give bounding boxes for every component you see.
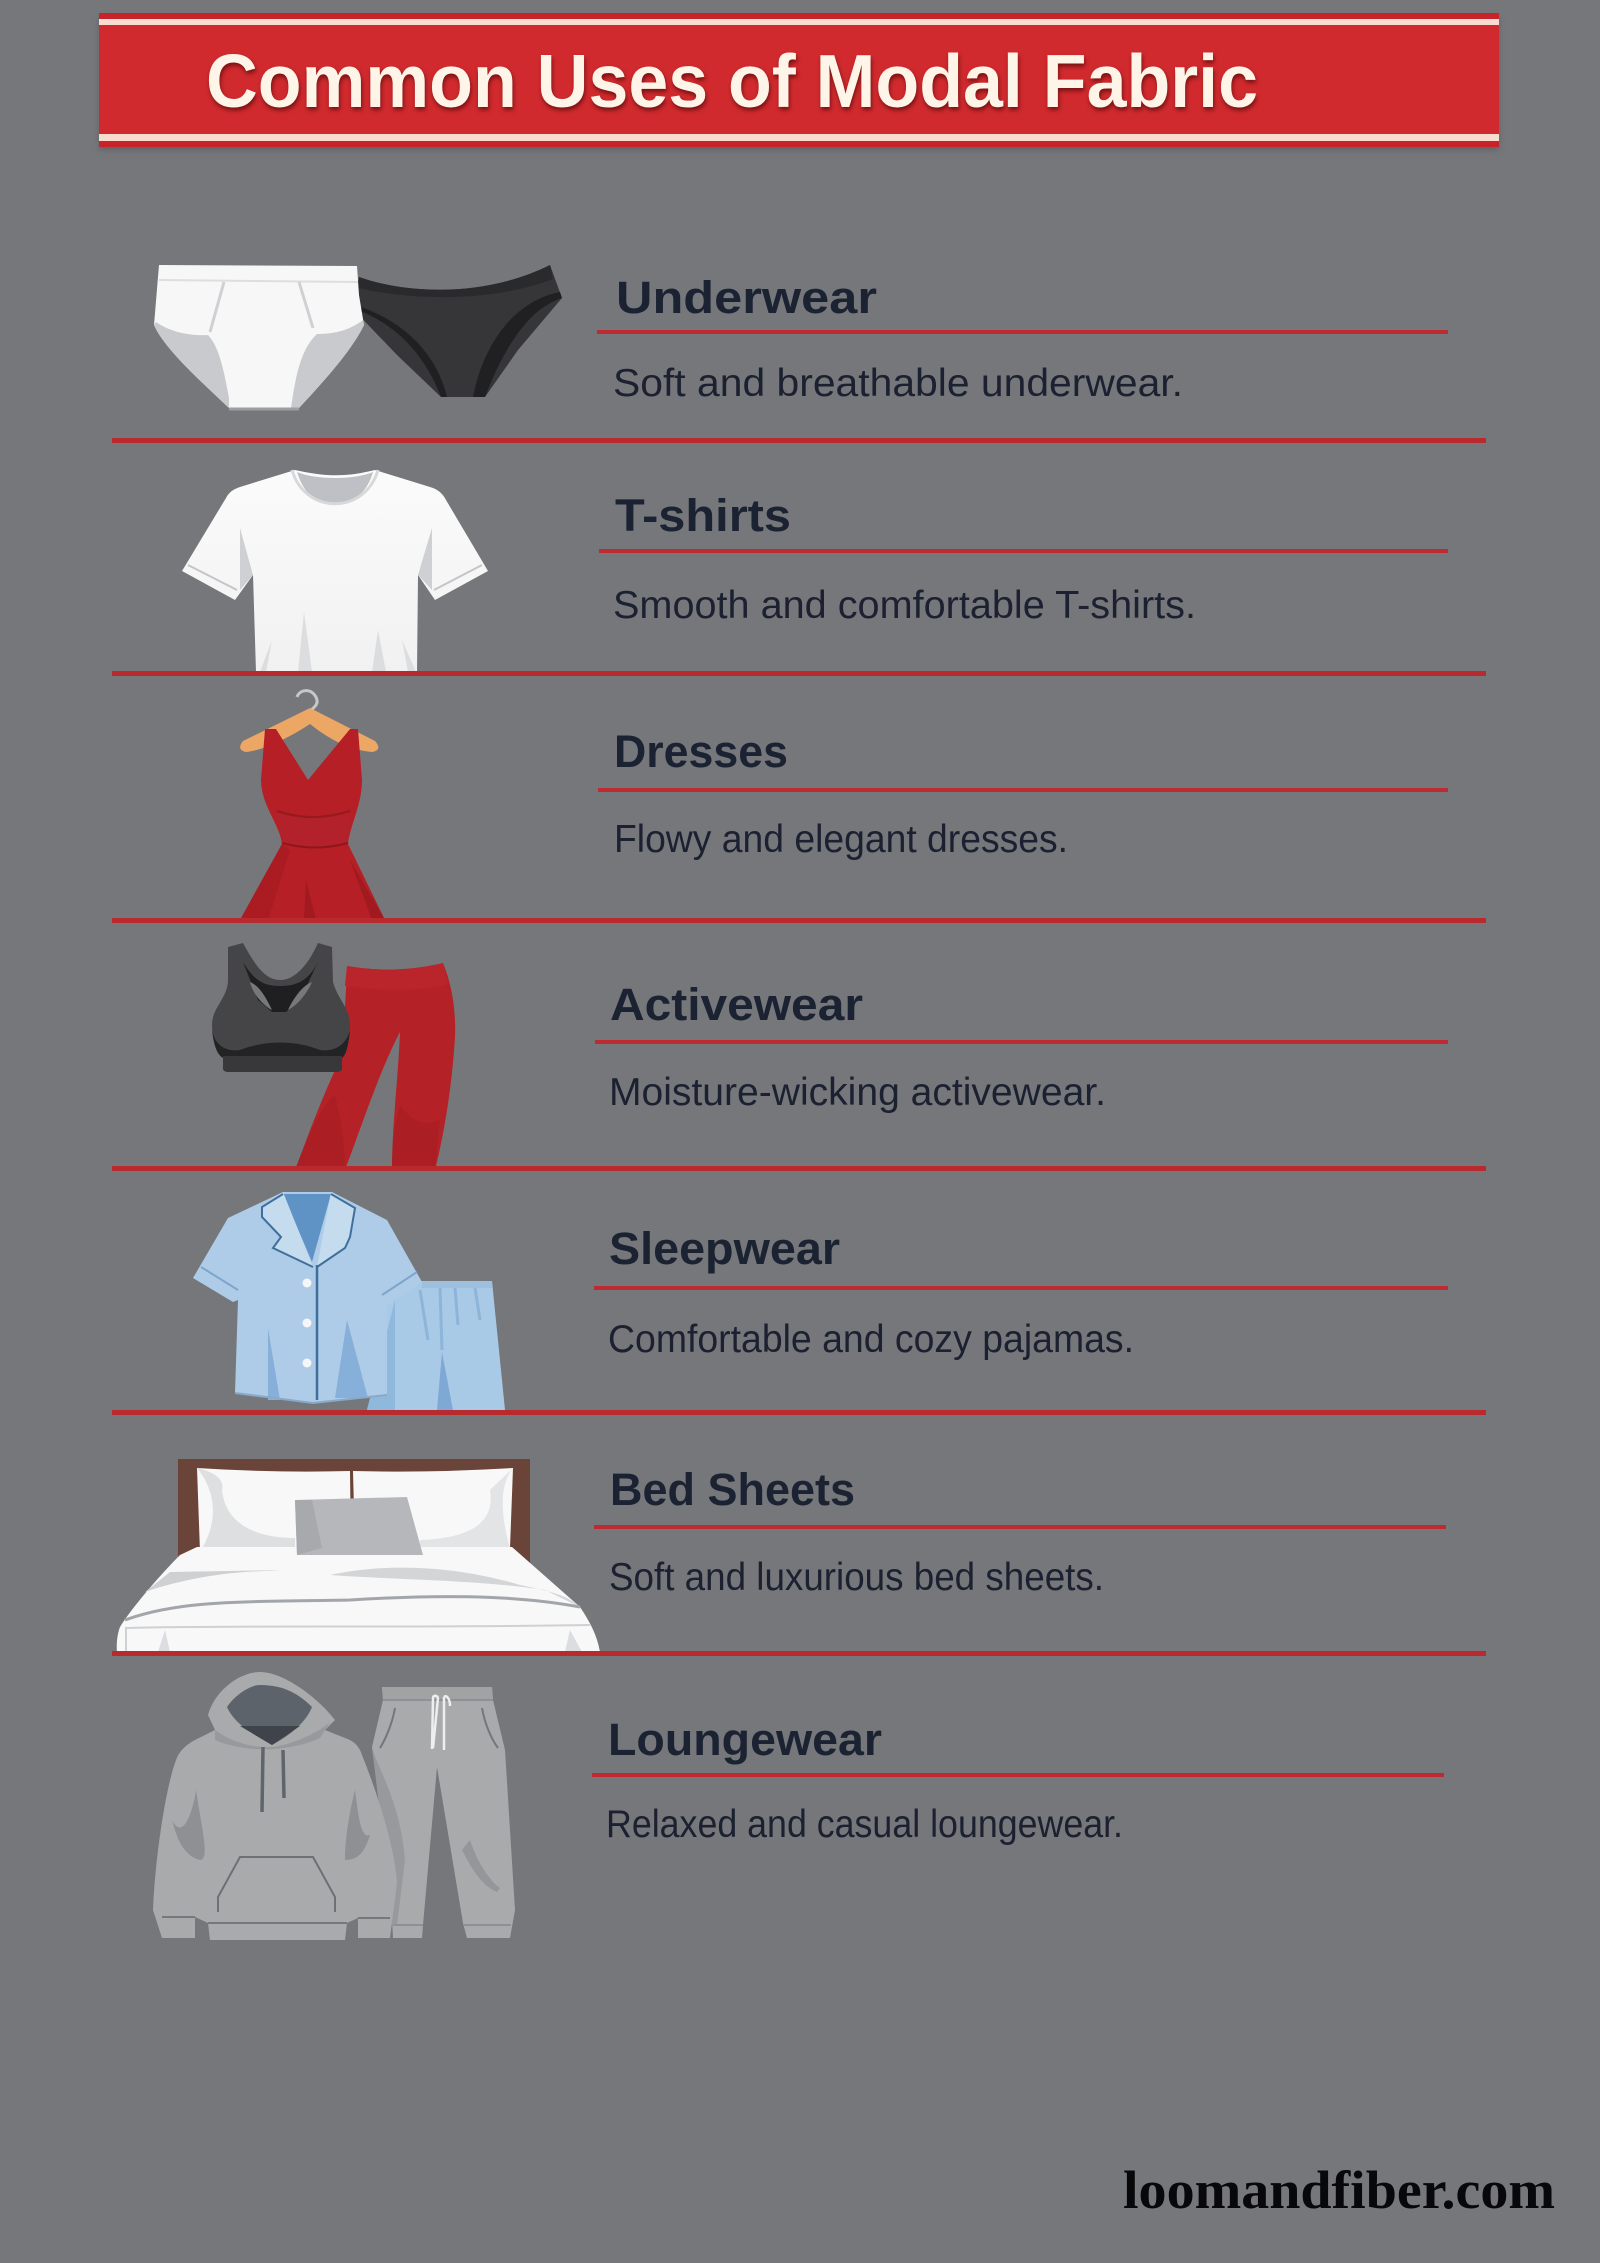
icon: grey sweatpants [372, 1687, 515, 1938]
icon: black sports bra [212, 943, 350, 1072]
heading: T-shirts: T-shirts [615, 490, 791, 541]
icon: white t-shirt [182, 470, 488, 672]
heading: Dresses: Dresses [614, 726, 788, 777]
heading: Loungewear: Loungewear [608, 1714, 882, 1765]
heading: Bed Sheets: Bed Sheets [610, 1464, 855, 1515]
icon: red leggings [295, 963, 455, 1170]
description: Bed Sheets: Soft and luxurious bed sheets. [609, 1556, 1104, 1599]
icon: red dress on hanger [240, 691, 385, 920]
description: T-shirts: Smooth and comfortable T-shirts. [613, 584, 1196, 627]
panel: bed sheets [117, 1459, 1446, 1652]
panel: loungewear [153, 1672, 1444, 1940]
description: Loungewear: Relaxed and casual loungewear. [606, 1803, 1123, 1846]
website credit: loomandfiber.com [1123, 2160, 1555, 2220]
panel: sleepwear [193, 1192, 1448, 1410]
description: Dresses: Flowy and elegant dresses. [614, 818, 1068, 861]
heading: Underwear: Underwear [616, 272, 877, 323]
icon: bed with pillows [117, 1459, 600, 1652]
panel: dresses [240, 691, 1448, 920]
description: Underwear: Soft and breathable underwear. [613, 362, 1183, 405]
description: Sleepwear: Comfortable and cozy pajamas. [608, 1318, 1134, 1361]
heading: Sleepwear: Sleepwear [609, 1223, 840, 1274]
icon: white briefs and black panties [154, 265, 562, 409]
icon: grey hoodie [153, 1672, 397, 1940]
title text: Common Uses of Modal Fabric [206, 39, 1258, 123]
title banner [99, 13, 1499, 150]
heading: Activewear: Activewear [610, 979, 863, 1030]
icon: blue pajamas [193, 1192, 505, 1410]
panel: activewear [212, 943, 1448, 1170]
panel: t-shirts [182, 470, 1448, 672]
panel: underwear [154, 265, 1448, 409]
description: Activewear: Moisture-wicking activewear. [609, 1071, 1106, 1114]
